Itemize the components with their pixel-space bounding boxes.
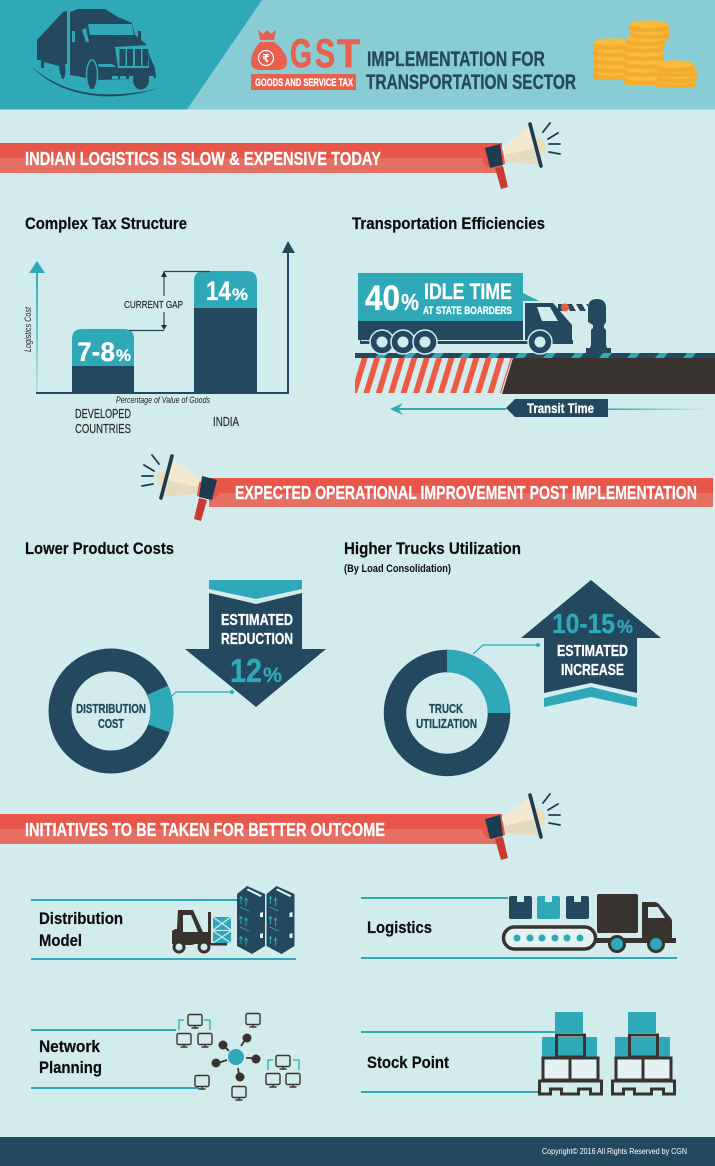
arrow: transit time: Transit Time (527, 400, 594, 416)
arrow: estimated reduction: ESTIMATED (221, 612, 293, 629)
stat: 40% idle time: 40 (365, 279, 400, 318)
y axis label: Logistics Cost (23, 307, 33, 352)
initiative: stock point: Stock Point (367, 1053, 449, 1072)
arrow: estimated reduction: REDUCTION (221, 631, 293, 648)
arrow: estimated increase: ESTIMATED (557, 643, 628, 660)
icon: semi truck (32, 9, 160, 96)
header band (0, 0, 715, 110)
arrow: estimated increase (521, 580, 661, 707)
icon: stacked boxes (237, 886, 294, 954)
initiative: distribution model: Distribution (39, 909, 123, 928)
icon: conveyor and truck (504, 894, 676, 952)
title: TRANSPORTATION SECTOR (366, 71, 576, 94)
heading: higher trucks utilization: (By Load Consolidation) (344, 563, 451, 575)
y axis arrow (29, 261, 45, 392)
right axis arrow (282, 241, 295, 394)
donut: truck utilization: TRUCK (429, 702, 463, 716)
icon: megaphone (142, 455, 220, 521)
title (366, 48, 576, 94)
initiative: network planning: Planning (39, 1058, 102, 1077)
category labels: DEVELOPED (75, 407, 131, 421)
icon: network hub (177, 1014, 300, 1100)
donut: truck utilization: UTILIZATION (416, 717, 477, 731)
bar: India: 14 (206, 276, 231, 306)
icon: GST money bag (251, 30, 287, 70)
initiative: stock point (361, 1012, 674, 1094)
current gap marker (124, 271, 210, 330)
x axis label: Percentage of Value of Goods (116, 395, 210, 405)
title: IMPLEMENTATION FOR (367, 48, 545, 71)
banner: Indian logistics: INDIAN LOGISTICS IS SLOW & EXPENSIVE TODAY (25, 149, 381, 169)
donut: distribution cost: COST (98, 717, 124, 731)
bar chart: logistics cost (23, 241, 295, 436)
icon: border barrier (558, 299, 611, 353)
GST wordmark: S (315, 32, 335, 76)
stat: 40% idle time: AT STATE BOARDERS (423, 305, 512, 317)
footer: Copyright© 2016 All Rights Reserved by CGN (542, 1146, 687, 1156)
initiative: network planning (31, 1014, 300, 1100)
bar: developed countries: % (116, 346, 131, 365)
footer (0, 1137, 715, 1166)
stat: 40% idle time: % (401, 289, 419, 315)
road illustration (355, 353, 715, 394)
arrow: transit time (390, 399, 710, 417)
arrow: estimated increase: % (617, 617, 633, 637)
donut: distribution cost: DISTRIBUTION (76, 702, 146, 716)
banner: initiatives: INITIATIVES TO BE TAKEN FOR BETTER OUTCOME (25, 820, 385, 840)
stat: 40% idle time (365, 279, 512, 318)
connector: distribution to reduction (172, 690, 234, 696)
bar: developed countries: 7-8 (77, 337, 115, 367)
icon: pallets (540, 1012, 674, 1094)
banner: expected operational improvement (142, 455, 713, 521)
stat: 40% idle time: IDLE TIME (424, 279, 512, 304)
heading: higher trucks utilization (344, 539, 521, 575)
current gap marker: CURRENT GAP (124, 299, 183, 311)
arrow: estimated increase: INCREASE (561, 662, 624, 679)
arrow: estimated reduction: % (263, 664, 282, 687)
GST wordmark: T (337, 32, 360, 76)
arrow: estimated reduction (185, 580, 326, 707)
GST tagline (251, 74, 356, 90)
banner: Indian logistics (0, 123, 560, 189)
bar: India: % (232, 285, 248, 304)
heading: complex tax structure: Complex Tax Structure (25, 214, 187, 233)
donut: distribution cost (60, 660, 162, 762)
donut: truck utilization (395, 661, 499, 765)
icon: GST money bag: ₹ (262, 52, 270, 65)
icon: gold coins (593, 20, 697, 88)
icon: megaphone (482, 794, 560, 860)
icon: megaphone (482, 123, 560, 189)
heading: lower product costs: Lower Product Costs (25, 539, 174, 558)
initiative: logistics: Logistics (367, 918, 432, 937)
initiative: network planning: Network (39, 1037, 100, 1056)
heading: higher trucks utilization: Higher Trucks Utilization (344, 539, 521, 558)
GST tagline: GOODS AND SERVICE TAX (255, 77, 353, 89)
icon: delivery truck with idle time (358, 273, 573, 354)
banner: initiatives (0, 794, 560, 860)
category labels: INDIA (213, 415, 240, 429)
GST wordmark: G (290, 32, 312, 76)
category labels (75, 407, 240, 436)
heading: transportation efficiencies: Transportation Efficiencies (352, 214, 545, 233)
bar: developed countries (72, 329, 134, 393)
arrow: estimated increase: 10-15 (552, 608, 615, 639)
initiative: logistics (361, 894, 677, 959)
bar: India (194, 271, 257, 393)
category labels: COUNTRIES (75, 422, 131, 436)
arrow: estimated reduction: 12 (230, 652, 262, 689)
icon: forklift (172, 910, 231, 952)
initiative: distribution model (31, 886, 296, 960)
GST wordmark (290, 32, 360, 76)
initiative: distribution model: Model (39, 931, 82, 950)
connector: truck utilization to increase (473, 643, 540, 654)
